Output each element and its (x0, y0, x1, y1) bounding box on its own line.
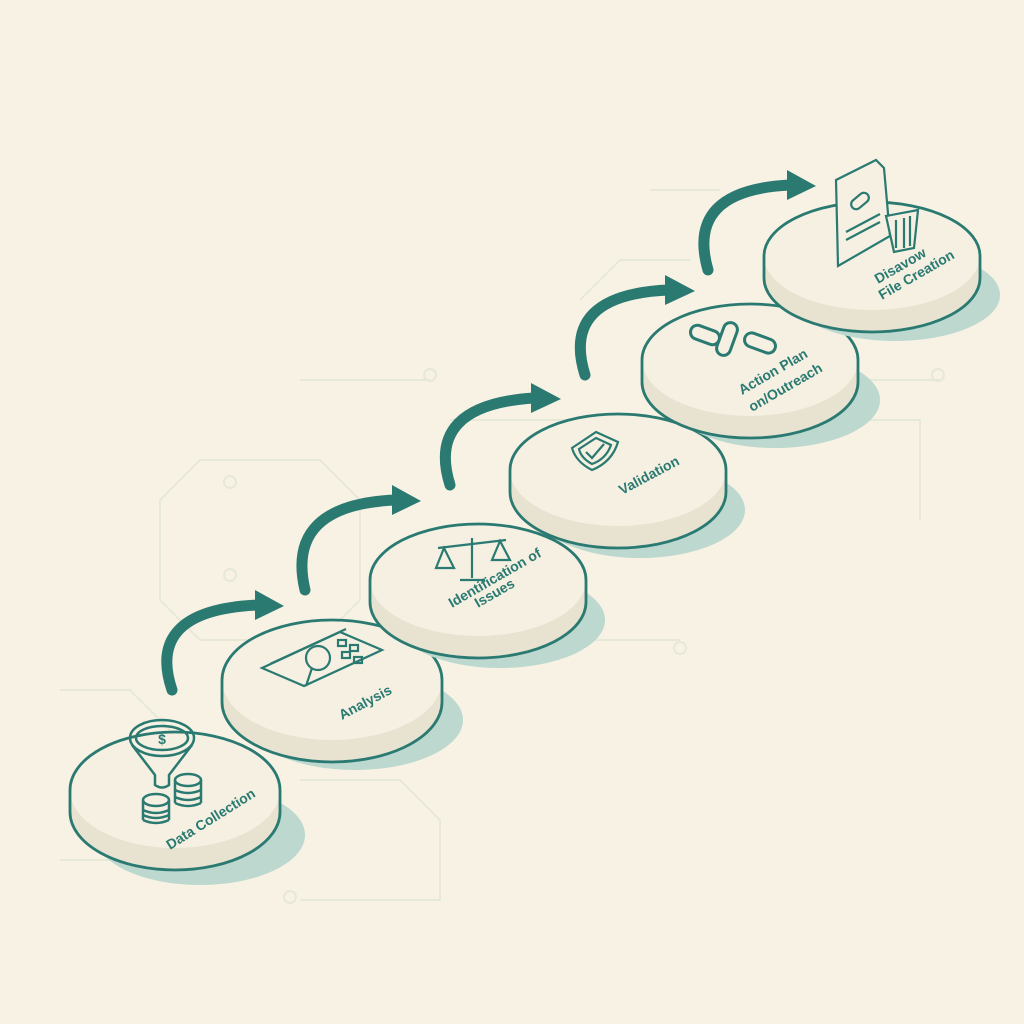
icon: browser with magnifier (262, 629, 382, 686)
stone: Action Plan/Outreach (642, 304, 880, 448)
stone: Disavow File Creation: File Creation (876, 246, 957, 303)
stone: Validation (510, 414, 745, 558)
arrow: 3 to 4 (445, 383, 561, 485)
label: Identification of Issues: Identification of (446, 544, 544, 611)
label: Validation: Validation (616, 452, 682, 498)
icon: chain links (689, 321, 777, 357)
icon: scales (436, 538, 510, 580)
icon: document with link and trash (836, 160, 918, 266)
label: Data Collection: Data Collection (163, 785, 258, 853)
label: Disavow File Creation: Disavow (872, 244, 929, 287)
stone: Disavow File Creation (764, 160, 1000, 341)
label: Analysis: Analysis (336, 681, 394, 723)
arrow: 5 to 6 (704, 170, 816, 270)
stone: Identification of Issues: Issues (472, 575, 517, 611)
stone: Identification of Issues (370, 524, 605, 668)
stone: Data Collection: $ (158, 731, 166, 747)
label: Action Plan/Outreach: Action Plan (736, 345, 810, 398)
stone: Action Plan/Outreach: on/Outreach (746, 360, 825, 415)
stone: Data Collection (70, 720, 305, 885)
arrow: 1 to 2 (167, 590, 284, 690)
icon: shield check (572, 432, 618, 470)
arrow: 4 to 5 (580, 275, 695, 375)
stone: Analysis (222, 620, 463, 770)
arrow: 2 to 3 (302, 485, 421, 590)
icon: funnel with coins (130, 720, 201, 823)
